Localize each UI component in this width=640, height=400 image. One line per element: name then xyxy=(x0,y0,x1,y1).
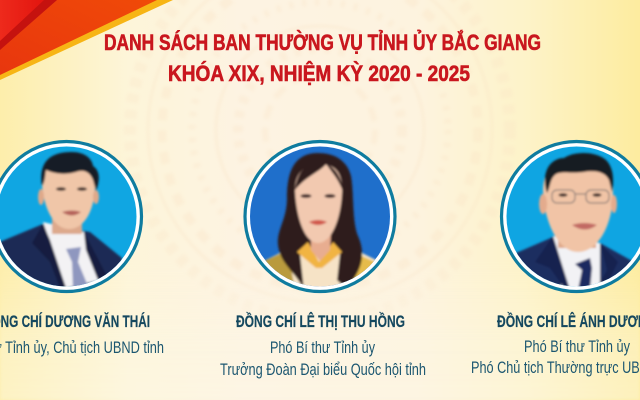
portrait: Lê Thị Thu Hồng xyxy=(245,142,395,300)
portrait: Dương Văn Thái xyxy=(0,142,142,300)
corner ribbon xyxy=(0,0,173,80)
person left: name and role xyxy=(0,312,164,357)
person centre: name and role: Trưởng Đoàn Đại biểu Quốc hội tỉnh xyxy=(220,360,426,379)
person right: name and role xyxy=(471,312,640,377)
title xyxy=(104,30,541,86)
person centre: name and role: Phó Bí thư Tỉnh ủy xyxy=(270,338,375,357)
portrait: Lê Ánh Dương xyxy=(502,142,640,300)
person centre: name and role: ĐỒNG CHÍ LÊ THỊ THU HỒNG xyxy=(236,312,405,331)
title: KHÓA XIX, NHIỆM KỲ 2020 - 2025 xyxy=(168,61,470,86)
person centre: name and role xyxy=(220,312,426,379)
